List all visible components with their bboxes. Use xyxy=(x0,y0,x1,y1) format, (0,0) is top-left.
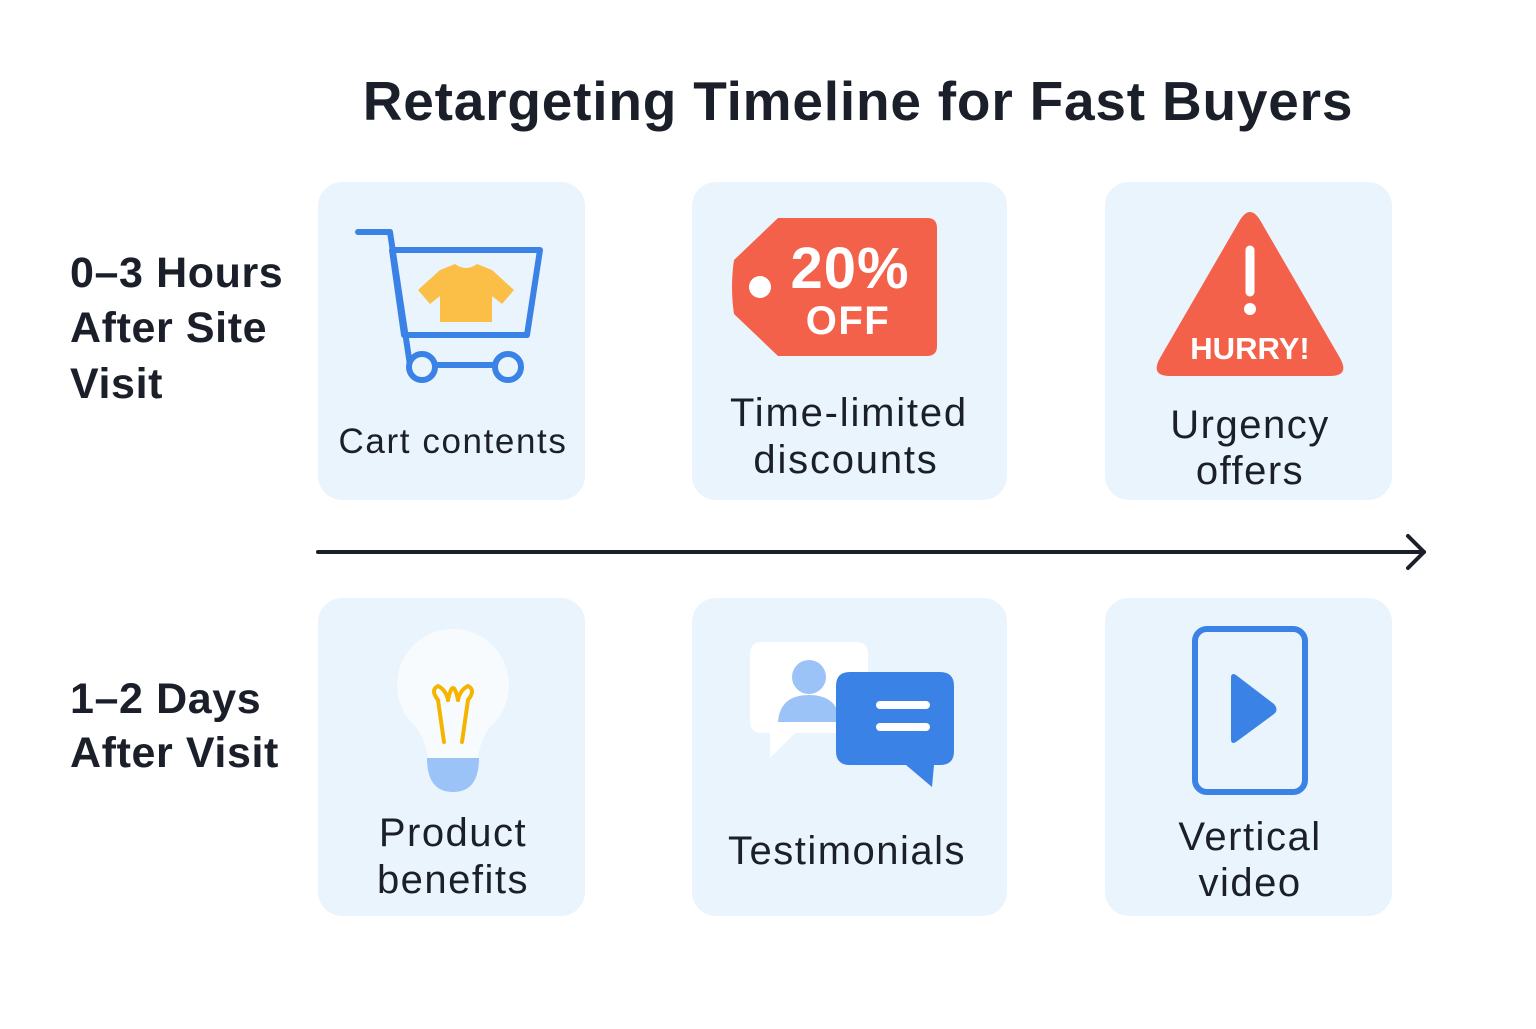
icon: chat bubbles xyxy=(750,642,954,787)
panel: cart contents: Cart contents xyxy=(339,422,567,461)
row label: 1-2 days: 1–2 Days xyxy=(70,675,261,723)
panel: time-limited discounts: discounts xyxy=(753,438,939,482)
panel: vertical video: video xyxy=(1198,861,1302,905)
panel: vertical video xyxy=(1105,598,1392,916)
panel: urgency offers: Urgency xyxy=(1170,403,1330,447)
panel: testimonials xyxy=(692,598,1007,916)
panel: product benefits xyxy=(318,598,585,916)
icon: discount tag xyxy=(732,218,937,356)
icon: discount tag: OFF xyxy=(806,299,890,343)
panel: cart contents xyxy=(318,182,585,500)
title: Retargeting Timeline for Fast Buyers xyxy=(363,70,1353,132)
icon: hurry warning triangle: HURRY! xyxy=(1190,331,1310,366)
row label: 0-3 hours: Visit xyxy=(70,360,163,408)
panel: vertical video: Vertical xyxy=(1178,815,1322,859)
panel: product benefits: Product xyxy=(379,811,527,855)
icon: shopping cart xyxy=(358,232,540,380)
icon: discount tag: 20% xyxy=(790,236,910,301)
row label: 0-3 hours: After Site xyxy=(70,304,267,352)
panel: testimonials: Testimonials xyxy=(728,829,966,873)
panel: time-limited discounts xyxy=(692,182,1007,500)
timeline arrow xyxy=(318,536,1424,568)
icon: light bulb xyxy=(397,629,509,792)
icon: phone with play button xyxy=(1195,629,1305,792)
panel: urgency offers: offers xyxy=(1196,449,1304,493)
panel: time-limited discounts: Time-limited xyxy=(730,391,968,435)
icon: hurry warning triangle xyxy=(1157,212,1343,376)
row label: 0-3 hours xyxy=(70,249,283,408)
panel: product benefits: benefits xyxy=(377,858,529,902)
row label: 1-2 days: After Visit xyxy=(70,729,279,777)
panel: urgency offers xyxy=(1105,182,1392,500)
row label: 0-3 hours: 0–3 Hours xyxy=(70,249,283,297)
row label: 1-2 days xyxy=(70,675,279,777)
